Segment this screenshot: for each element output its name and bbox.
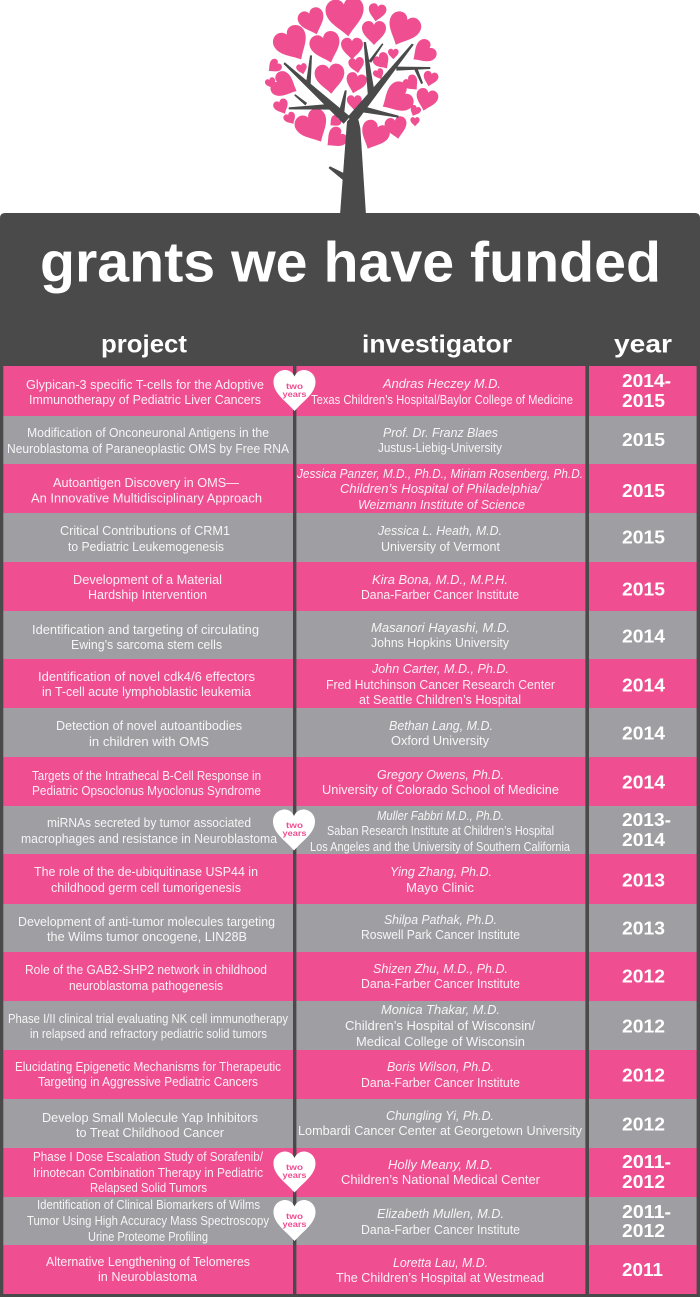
row 15: Elucidating Epigenetic Mechanisms for Therapeutic [15,1059,281,1074]
row 3: Autoantigen Discovery in OMS— [53,475,239,490]
row 12: 2013 [622,918,665,938]
row 3: An Innovative Multidisciplinary Approach [31,490,262,506]
row 19: Loretta Lau, M.D. [393,1255,488,1270]
row 16: Lombardi Cancer Center at Georgetown University [298,1123,582,1138]
column heading: year: year [614,330,672,358]
row 18: Tumor Using High Accuracy Mass Spectroscopy [27,1213,269,1228]
row 19: in Neuroblastoma [98,1269,198,1284]
row 15: Targeting in Aggressive Pediatric Cancers [38,1074,258,1089]
row 8: 2014 [622,724,665,744]
row 9: 2014 [622,772,665,792]
badge: two years, row 1: years [282,389,307,399]
row 12: Development of anti-tumor molecules targeting [18,914,275,929]
row 1 [3,366,697,416]
row 6: 2014 [622,626,665,646]
row 13 [3,952,697,1001]
row 9: Gregory Owens, Ph.D. [377,767,504,782]
row 13: 2012 [622,966,665,986]
row 5 [3,562,697,611]
row 11: 2013 [622,870,665,890]
row 1: Texas Children’s Hospital/Baylor College of Medicine [311,392,573,407]
grants table [3,366,697,1294]
row 8 [3,708,697,757]
row 7: Fred Hutchinson Cancer Research Center [326,677,556,692]
badge: two years, row 18: years [282,1219,307,1229]
row 8: Detection of novel autoantibodies [56,718,242,733]
row 10: 2014 [622,830,665,850]
badge: two years, row 10: years [282,828,307,838]
row 16: 2012 [622,1114,665,1134]
row 1: Glypican-3 specific T-cells for the Adoptive [26,377,264,392]
row 10: Saban Research Institute at Children’s Hospital [327,823,554,838]
row 18: 2011- [622,1202,671,1222]
row 15 [3,1050,697,1099]
row 13: Role of the GAB2-SHP2 network in childhood [25,962,267,977]
row 12: Shilpa Pathak, Ph.D. [384,912,497,927]
row 2: Modification of Onconeuronal Antigens in the [27,425,269,440]
row 13: neuroblastoma pathogenesis [69,978,223,993]
row 16: Develop Small Molecule Yap Inhibitors [42,1110,258,1125]
icon: heart tree [264,0,440,215]
row 11: Mayo Clinic [406,880,475,895]
row 17: Holly Meany, M.D. [388,1157,493,1172]
row 14: Monica Thakar, M.D. [381,1002,500,1017]
row 7: John Carter, M.D., Ph.D. [371,661,509,676]
row 15: Boris Wilson, Ph.D. [387,1059,494,1074]
row 6: Ewing’s sarcoma stem cells [71,637,222,652]
row 13: Shizen Zhu, M.D., Ph.D. [373,961,508,976]
row 15: 2012 [622,1066,665,1086]
row 10 [3,806,697,854]
row 6: Masanori Hayashi, M.D. [371,620,510,635]
row 18 [3,1197,697,1245]
row 18: Elizabeth Mullen, M.D. [377,1206,504,1221]
row 17: 2011- [622,1152,671,1172]
row 2: Neuroblastoma of Paraneoplastic OMS by Free RNA [7,441,289,456]
row 5: Hardship Intervention [88,587,207,602]
badge: two years, row 17: two [286,1162,303,1172]
row 18: 2012 [622,1221,665,1241]
row 17 [3,1148,697,1197]
row 1: Immunotherapy of Pediatric Liver Cancers [29,392,261,407]
row 7: Identification of novel cdk4/6 effectors [38,669,255,684]
row 11: The role of the de-ubiquitinase USP44 in [34,864,258,879]
row 14: Children’s Hospital of Wisconsin/ [345,1018,535,1033]
badge: two years, row 1 [274,370,316,411]
row 9 [3,757,697,806]
row 2 [3,416,697,464]
row 8: Oxford University [391,733,489,748]
row 14: Medical College of Wisconsin [356,1034,525,1049]
row 9: Targets of the Intrathecal B-Cell Response in [32,768,261,783]
row 5: Dana-Farber Cancer Institute [361,587,519,602]
badge: two years, row 18: two [286,1211,303,1221]
row 5: Kira Bona, M.D., M.P.H. [372,572,508,587]
row 18: Identification of Clinical Biomarkers of Wilms [37,1197,260,1212]
row 11 [3,854,697,904]
row 3 [3,464,697,513]
row 1: 2015 [622,391,665,411]
row 19 [3,1245,697,1294]
row 17: 2012 [622,1172,665,1192]
badge: two years, row 17: years [282,1170,307,1180]
row 9: Pediatric Opsoclonus Myoclonus Syndrome [32,783,261,798]
row 4: University of Vermont [381,539,500,554]
row 16 [3,1099,697,1148]
row 10: miRNAs secreted by tumor associated [47,815,251,830]
row 8: in children with OMS [89,734,209,749]
row 7: 2014 [622,676,665,696]
row 7: at Seattle Children’s Hospital [359,692,521,707]
row 6: Johns Hopkins University [371,635,509,650]
row 8: Bethan Lang, M.D. [389,718,493,733]
badge: two years, row 18 [274,1200,316,1241]
row 14 [3,1001,697,1050]
row 2: 2015 [622,430,665,450]
row 3: Jessica Panzer, M.D., Ph.D., Miriam Rosenberg, Ph.D. [296,466,583,481]
row 10: macrophages and resistance in Neuroblastoma [21,831,278,846]
row 1: 2014- [622,371,671,391]
row 7: in T-cell acute lymphoblastic leukemia [42,684,252,699]
row 7 [3,659,697,708]
row 18: Dana-Farber Cancer Institute [361,1222,520,1237]
row 5: 2015 [622,580,665,600]
row 19: The Children’s Hospital at Westmead [336,1270,544,1285]
row 4: Jessica L. Heath, M.D. [377,523,502,538]
row 2: Justus-Liebig-University [378,440,502,455]
tree trunk and branches [284,42,430,215]
row 17: Phase I Dose Escalation Study of Sorafenib/ [33,1149,263,1164]
row 14: 2012 [622,1016,665,1036]
row 18: Urine Proteome Profiling [88,1229,208,1244]
row 10: 2013- [622,810,671,830]
row 15: Dana-Farber Cancer Institute [361,1075,520,1090]
row 5: Development of a Material [73,572,222,587]
row 4: 2015 [622,528,665,548]
row 6 [3,611,697,659]
row 4: Critical Contributions of CRM1 [60,523,230,538]
row 10: Los Angeles and the University of Southern California [310,839,571,854]
badge: two years, row 1: two [286,381,303,391]
row 11: Ying Zhang, Ph.D. [390,864,492,879]
row 16: Chungling Yi, Ph.D. [386,1108,494,1123]
row 1: Andras Heczey M.D. [382,376,501,391]
column heading: investigator: investigator [362,330,512,358]
badge: two years, row 10: two [286,820,303,830]
tree foliage hearts [264,0,440,155]
row 4: to Pediatric Leukemogenesis [68,539,224,554]
row 3: Children’s Hospital of Philadelphia/ [340,481,542,496]
row 12: Roswell Park Cancer Institute [361,927,520,942]
row 3: 2015 [622,481,665,501]
row 13: Dana-Farber Cancer Institute [361,976,520,991]
row 17: Children’s National Medical Center [341,1172,541,1187]
row 14: in relapsed and refractory pediatric solid tumors [30,1026,267,1041]
row 19: 2011 [622,1260,663,1280]
row 19: Alternative Lengthening of Telomeres [46,1254,250,1269]
column heading: project: project [101,330,188,358]
row 3: Weizmann Institute of Science [358,497,525,512]
row 9: University of Colorado School of Medicine [322,782,559,797]
row 11: childhood germ cell tumorigenesis [51,880,241,895]
row 10: Muller Fabbri M.D., Ph.D. [377,808,504,823]
badge: two years, row 10 [273,810,315,850]
row 2: Prof. Dr. Franz Blaes [383,425,498,440]
title: grants we have funded [40,230,661,294]
badge: two years, row 17 [274,1152,316,1192]
row 17: Irinotecan Combination Therapy in Pediatric [33,1165,263,1180]
row 17: Relapsed Solid Tumors [90,1180,207,1195]
row 4 [3,513,697,562]
row 6: Identification and targeting of circulating [32,622,259,637]
row 14: Phase I/II clinical trial evaluating NK cell immunotherapy [8,1011,288,1026]
row 16: to Treat Childhood Cancer [76,1125,225,1140]
row 12: the Wilms tumor oncogene, LIN28B [47,929,247,944]
row 12 [3,904,697,952]
